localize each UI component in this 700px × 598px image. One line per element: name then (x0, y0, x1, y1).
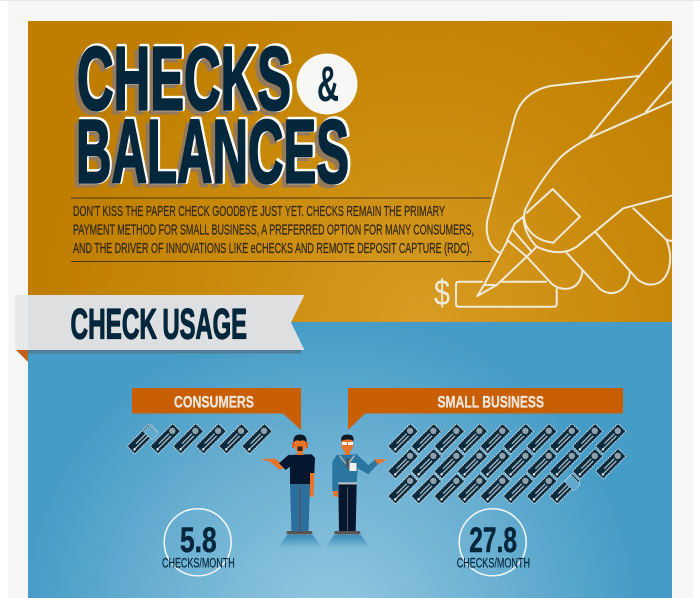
icon: hand writing with pen (456, 37, 672, 307)
intro text: AND THE DRIVER OF INNOVATIONS LIKE eCHECKS AND REMOTE DEPOSIT CAPTURE (RDC). (73, 241, 472, 257)
title lettering (76, 29, 349, 202)
title shadow (72, 33, 345, 206)
pictogram: small business checks (388, 423, 626, 504)
icon: dollar sign: $ (434, 272, 450, 313)
ampersand badge: & (317, 56, 339, 112)
intro text (71, 198, 491, 262)
figure: small business man (325, 434, 387, 548)
stat: small business 27.8 checks per month (457, 509, 530, 576)
section banner: check usage (15, 295, 304, 362)
section heading: USAGE (162, 300, 247, 348)
callout: consumers (132, 388, 301, 430)
title outline: CHECKS (78, 28, 293, 128)
panel: blue check usage (28, 322, 672, 598)
title lettering: CHECKS (77, 29, 291, 129)
title (72, 28, 351, 206)
title outline: BALANCES (77, 102, 351, 202)
panel: gold header (28, 21, 672, 323)
callout: consumers: CONSUMERS (174, 393, 254, 412)
intro text: DON'T KISS THE PAPER CHECK GOODBYE JUST YET. CHECKS REMAIN THE PRIMARY (73, 204, 445, 220)
section heading: CHECK (70, 300, 157, 348)
title shadow: CHECKS (73, 33, 287, 133)
ampersand badge (296, 54, 358, 114)
stat: consumers 5.8 checks per month: 5.8 (180, 521, 217, 560)
stat: small business 27.8 checks per month: 27.8 (469, 521, 517, 560)
title outline (77, 28, 351, 202)
stat: consumers 5.8 checks per month (162, 509, 235, 576)
pictogram: consumer checks (127, 423, 272, 454)
callout: small business: SMALL BUSINESS (438, 393, 544, 412)
title lettering: BALANCES (76, 102, 349, 202)
stat: small business 27.8 checks per month: CHECKS/MONTH (457, 554, 530, 570)
title shadow: BALANCES (72, 106, 345, 206)
figure: consumer man (260, 434, 322, 548)
callout: small business (348, 388, 623, 430)
stat: consumers 5.8 checks per month: CHECKS/MONTH (162, 554, 235, 570)
